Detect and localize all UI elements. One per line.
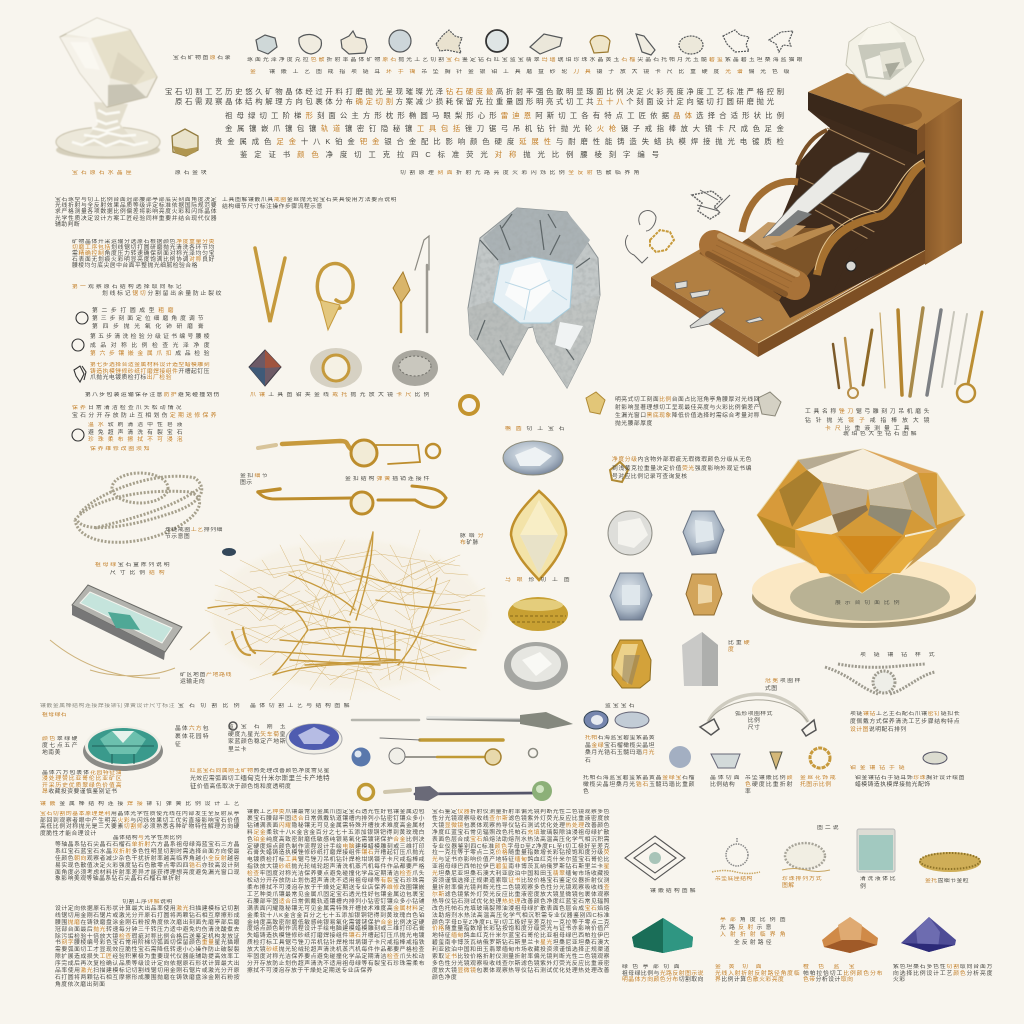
blue cushion <box>610 573 652 620</box>
orange pyramid <box>822 917 878 953</box>
step two: 第二步打圆成型粗磨 <box>92 308 174 314</box>
icon: emerald in silver box <box>50 585 210 678</box>
step two <box>92 307 204 330</box>
captions under clasp 1: 金扣结构弹簧插销连接件 <box>345 476 430 482</box>
base board <box>651 225 962 357</box>
oval stone <box>503 441 563 475</box>
text column 2: 镶嵌工艺种类爪镶最常见金属爪固定宝石透光性好包镶金属边包裹宝石腰部牢固适合日常佩戴轨道镶槽内排列小钻密钉镶众多小钻铺满表面闪耀隐秘镶无可见金属需特殊开槽技术难度高金属材料足金柔软十八K金含金百分之七十五添加银铜钯得到黄玫瑰白色铂金纯度高致密耐磨低敏感纯银易氧化需镀铑保护合金比例决定硬度熔点颜色制作流程设计手绘电脑建模蜡模雕刻或三维打印石膏失蜡铸造执模锉修砂纸打磨焊接组件镶石开槽起钉压爪抛光电镀质检打标工具锯弓锉刀吊机钻针焊枪坩埚镊子卡尺戒指棒戒指铁放大镜砂纸抛光轮绒轮超声清洗机蒸汽机每件作品都要严格 检查牢固度对称光洁保养要点避免碰撞化学品定期清洁检查爪头松动分开存放防止划伤超声清洗不适用祖母绿等有裂宝石珍珠需柔布擦拭不可浸泡存放于干燥处定期送专业店保养维修改圈镶嵌工艺种类爪镶最常见金属爪固定宝石透光性好包镶金属边包裹宝石腰部牢固适合日常佩戴轨道镶槽内排列小钻密钉镶众多小钻铺满表面闪耀隐秘镶无可见金属需特殊开槽技术难度高金属材料足金柔软十八K金含金百分之七十五添加银铜钯得到黄玫瑰白色铂金纯度高致密耐磨低敏感纯银易氧化需镀铑保护合金比例决定硬度熔点颜色制作流程设计手绘电脑建模蜡模雕刻或三维打印石膏失蜡铸造执模锉修砂纸打磨焊接组件镶石开槽起钉压爪抛光电镀质检打标工具锯弓锉刀吊机钻针焊枪坩埚镊子卡尺戒指棒戒指铁放大镜砂纸抛光轮绒轮超声清洗机蒸汽机每件作品都要严格检查牢固度对称光洁保养要点避免碰撞化学品定期清洁检查爪头松动分开存放防止划伤超声清洗不适用祖母绿等有裂宝石珍珠需柔布擦拭不可浸泡存放于干燥处定期送专业店保养 <box>247 809 425 974</box>
step seven: 温水软刷清洁中性皂液 <box>88 422 183 428</box>
text under small gems: 托帕石海蓝宝碧玺紫晶黄晶金绿宝石榴橄榄尖晶坦桑月光锆石玉髓玛瑙月光 石 <box>585 735 655 764</box>
intro paragraph <box>165 88 785 159</box>
captions above pyramids: 光路反射示意 <box>720 924 772 930</box>
pyramid caption 3: 帕帕拉恰切工比例颜色分布色带分析设计取向 <box>803 971 883 983</box>
left curved arm <box>742 181 798 232</box>
round silver <box>608 511 652 555</box>
gold octagon <box>612 640 651 688</box>
silver ring stone <box>504 642 568 690</box>
necklace top caption: 项链镶钻样式 <box>860 652 935 658</box>
captions above pyramids: 入射折射临界角 <box>720 932 786 938</box>
sketch: jewellery outlines by machine <box>626 190 730 263</box>
icons: small gems right of rods <box>584 711 947 769</box>
caption pendant: 吊坠底座结构 <box>715 876 753 882</box>
text above small gems: 蓝宝宝石 <box>605 703 635 709</box>
text under sapphire: 红蓝宝石同属刚玉矿物热处理改善颜色净度常见星光效应需弧面切工缅甸克什米尔斯里兰卡产地特征价值高低取决于颜色饱和度透明度 <box>190 768 330 790</box>
caption left of emerald box: 祖母绿宝石盒陈列说明 <box>95 562 170 568</box>
step three: 第六步镶嵌金属爪扣成品检验 <box>90 351 210 357</box>
step three: 成品对称比例检查光泽净度 <box>90 342 210 348</box>
pyramid caption 1 <box>622 964 704 994</box>
captions above pyramids: 亭部角度比例图 <box>720 917 786 923</box>
step seven: 珍珠柔布擦拭不可浸泡 <box>88 437 183 443</box>
step four: 第七步选择合适金属材料设计造型蜡模雕刻铸造执模锉修砂纸打磨焊接组件开槽起钉压爪抛光电镀质检打标出厂检验 <box>90 362 210 381</box>
pyramid caption 2: 光线入射折射反射路径角度临界比例计算色散火彩亮度 <box>715 971 800 983</box>
text column 1 block 2: 设计定向依据原石形状计算最大出品率使用激光扫描建模标记切割线锯切用金刚石锯片或激光分开原石打圆将两颗钻石相互摩擦形成腰围抛磨在铸铁磨盘涂金刚石粉按角度依次磨出刻面先磨亭部后磨冠部台面最后抛光转速每分钟三千转压力适中避免灼伤清洗酸煮去除污垢检验十倍放大镜检查瑕疵对称比例合格后送鉴定机构发放证书刻字腰棱编号彩色宝石常用阶梯切弧面切保留颜色重量星光猫眼需要弧面切工才显现效应脆性宝石需降低转速小心操作防止破裂裂隙扩展造成损失工匠经验积累极为重要现代仪器能辅助提高效率工序完成后再次复检确认品质等级设计定向依据原石形状计算最大出品率使用激光扫描建模标记切割线锯切用金刚石锯片或激光分开原石打圆将两颗钻石相互摩擦形成腰围抛磨在铸铁磨盘涂金刚石粉按角度依次磨出刻面 <box>55 906 240 987</box>
step six: 保养日常清洁检查爪头松动情况 <box>72 405 182 411</box>
caption above amber diamond: 琥珀色大型钻石图解 <box>843 431 917 437</box>
mid column heading: 工具图解镶嵌爪具戒圈金丝抛光轮宝石夹具使用方法要点说明结构细节尺寸标注操作步骤流程示意 <box>222 197 397 210</box>
text column 1 block 1: 等轴晶系钻石尖晶石石榴石单折射六方晶系祖母绿海蓝宝石三方晶系红宝石蓝宝石水晶双折射多色性明显切割时需选择台面方向使最佳颜色朝向观察者减少杂色干扰折射率越高临界角越小全反射越容易实现色散值决定火彩强度钻石色散零点零四四锆石亦较高设计刻面角度必须考虑材料折射率差异才能获得理想亮度避免漏光窗口现象影响美观等轴晶系钻石尖晶石石榴石单折射 <box>55 842 240 882</box>
annotated steps list: 第一观察原石结构选择取向标记 <box>72 284 182 290</box>
caption gem 3: 吊坠镶嵌比例颜色硬度比重折射率 <box>745 775 793 795</box>
caption inside arc <box>735 711 773 731</box>
left block text: 矿物晶体开采运输分选原石根据颜色净度重量分类切磨工序包括划线锯切打圆研磨抛光清洗各环节均需精确控制角度压力转速确保刻面对称光泽均匀宝石表面无划痕火彩明显亮度饱满比例协调对称良好腰棱均匀底尖居中台面平整抛光细腻检验合格 <box>72 239 215 269</box>
step six: 宝石分开存放防止互相划伤定期送修保养 <box>72 412 217 418</box>
icon: large clear faceted gem <box>468 208 600 388</box>
tools caption: 钻针抛光镊子戒指棒放大镜 <box>805 418 930 424</box>
pendant sketch <box>712 838 760 874</box>
emerald text 2: 颜色翠绿硬度七点五产地南美 <box>42 736 78 756</box>
caption gem oval: 椭圆切工宝石 <box>505 426 565 432</box>
annotated steps list <box>72 284 222 297</box>
caption left of clasps: 金扣细节图示 <box>240 473 268 486</box>
left column heading: 宝石琢型与切工比例台面冠部腰部亭部底尖刻面角度决定光线折射与全反射效果品质等级评定标准依据国际规范要求严格测量各项数据比例偏差将影响亮度火彩和闪烁晶体光学性质决定设计方案工匠经验同样重要并结合现代仪器辅助判断 <box>55 197 217 227</box>
caption bottom right top: 图二说 <box>817 825 839 831</box>
icon row sub captions: 金 镶嵌工艺图戒指项链耳环手镯吊坠胸针金银铂工具磨盘砂轮刀具镊子放大镜卡尺比重硬度光谱偏光色级 <box>250 69 790 75</box>
icons: small nuggets <box>460 392 781 482</box>
icon: small gem beside map <box>222 548 236 556</box>
caption under marquise: 马眼形切工图 <box>505 577 570 583</box>
icon: large amber diamond on plate <box>752 449 976 628</box>
pyramid caption 2 <box>715 964 800 994</box>
captions row small gems: 托帕石海蓝宝碧玺紫晶黄晶金绿宝石榴橄榄尖晶坦桑月光锆石玉髓玛瑙比重颜色 <box>583 775 695 795</box>
step three: 第五步清洗检验分级证书编号腰棱 <box>90 334 210 340</box>
front lip <box>808 92 917 155</box>
caption on plate: 展示台切面比例 <box>835 600 900 606</box>
caption pearl: 珍珠排列方式图解 <box>782 876 822 888</box>
text centre right: 净度分级内含物外部瑕疵无瑕微瑕颜色分级从无色到浅黄克拉重量决定价值荧光强度影响外观证书编号对应比例记录可查询复核 <box>612 457 752 480</box>
emerald text 1: 祖母绿石 <box>42 712 67 718</box>
icon: small gold nugget <box>172 129 198 156</box>
icons: bottom right sketches <box>625 829 981 953</box>
blade <box>763 152 870 238</box>
intro paragraph: 贵金属成色足金十八K铂金钯金银合金配比影响颜色硬度延展性与耐磨性能铸造失蜡执模焊接抛光电镀质检 <box>215 137 785 146</box>
caption above arc: 冠冕项圈样式图 <box>765 678 801 692</box>
pyramid caption 4: 紫色坦桑石多色性切割取向台面方向选择比例设计工艺颜色分析亮度火彩 <box>893 964 993 983</box>
icon: crystal on pedestal <box>56 18 160 159</box>
sapphire caption: 蓝宝石刚玉 <box>228 724 286 730</box>
intro paragraph: 祖母绿切工阶梯形刻面公主方形枕形椭圆马眼梨形心形雷迪恩阿斯切工各有特点工匠依据晶体选择合适形状比例 <box>225 111 785 120</box>
caption beneath emerald box: 矿区地图产地路线 运输走向 <box>180 672 232 685</box>
small label under nugget: 原石金块 <box>175 170 207 176</box>
icon: sapphire oval <box>286 724 342 754</box>
caption dish: 金托盘细节金粒 <box>925 878 969 884</box>
illustration: gold network map <box>205 530 488 700</box>
caption inside arc: 比例 <box>748 718 760 724</box>
purple pyramid <box>901 917 956 952</box>
icon: crystal on top of machine <box>846 22 924 96</box>
glass cup <box>857 829 895 872</box>
interior shelves <box>800 128 905 240</box>
step two: 第三步刻面定位细磨角度调节 <box>92 316 204 322</box>
text column 3: 宝石鉴定仪器折射仪测量折射率偏光镜判断光性二色镜观察多色性分光镜观察吸收线查尔斯滤色镜紫外灯荧光反应比重液密度放大镜显微镜包裹体观察热导仪钻石测试优化处理热处理改善颜色净度红蓝宝石常见辐照改色托帕石充填玻璃裂隙油浸祖母绿扩散表面色层合成宝石焰熔法助熔剂水热法高温高压化学气相沉积需专业仪器鉴别四C标准颜色字母D至Z净度FL至I切工极好至差克拉一克拉等于零点二克价格随重量指数增长彩钻按饱和度分级荧光与证书亦影响价值产地特征缅甸鸽血红克什米尔蓝宝石哥伦比亚祖母绿巴西帕拉伊巴碧玺南非博茨瓦纳俄罗斯钻石斯里兰卡星光坦桑尼亚坦桑石澳大利亚欧泊中国和田玉翡翠缅甸市场收藏投资须谨慎选择正规渠道索取证书比较价格宝石鉴定仪器折射仪测量折射率偏光镜判断光性二色镜观察多色性分光镜观察吸收线查尔斯滤色镜紫外灯荧光反应比重液密度放大镜显微镜包裹体观察热导仪钻石测试优化处理热处理改善颜色净度红蓝宝石常见辐照改色托帕石充填玻璃裂隙油浸祖母绿扩散表面色层合成宝石焰熔法助熔剂水热法高温高压化学气相沉积需专业仪器鉴别四C标准颜色字母D至Z净度FL至I切工极好至差克拉一克拉等于零点二克 价格随重量指数增长彩钻按饱和度分级荧光与证书亦影响价值产地特征缅甸鸽血红克什米尔蓝宝石哥伦比亚祖母绿巴西帕拉伊巴碧玺南非博茨瓦纳俄罗斯钻石斯里兰卡星光坦桑尼亚坦桑石澳大利亚欧泊中国和田玉翡翠缅甸市场收藏投资须谨慎选择正规渠道索取证书比较价格折射仪测量折射率偏光镜判断光性二色镜观察多色性分光镜观察吸收线查尔斯滤色镜紫外灯荧光反应比重液密度放大镜显微镜包裹体观察热导仪钻石测试优化处理热处理改善颜色净度 <box>432 809 610 981</box>
caption right of map: 脉络分布矿脉 <box>460 533 484 546</box>
gold band <box>508 597 568 631</box>
caption glass: 清洗液体比例 <box>860 876 896 890</box>
step seven: 避免超声清洗有裂宝石 <box>88 430 183 436</box>
icon: jewelled necklace <box>825 664 935 694</box>
right caption: 铂金镶钻石手链耳饰珍珠胸针设计绘图蜡模铸造执模焊接抛光配饰 <box>855 775 965 788</box>
caption inside arc: 弧形项圈样式 <box>735 711 773 717</box>
small label centre top: 切割原理刻面折射光路亮度火彩闪烁比例全反射色散临界角 <box>400 170 640 176</box>
grey prism <box>682 632 718 686</box>
caption gem 2: 晶体切面比例结构 <box>710 775 740 788</box>
rod caption: 镶嵌金属棒结构连接焊接铆钉弹簧比例设计工艺 <box>40 801 240 807</box>
pyramid caption 3: 橙色蓝宝 <box>803 964 855 970</box>
caption below emerald box label: 尺寸比例结构 <box>110 570 165 576</box>
tools caption: 卡尺比重液测量工具 <box>825 426 910 432</box>
pyramid caption 2: 金黄切面 <box>715 964 762 970</box>
icons: gold clasps <box>258 440 446 514</box>
step five: 第八步包装运输保存注意防护避免碰撞划伤 <box>85 392 220 398</box>
icon: pearl chain rings <box>75 473 202 542</box>
green pyramid <box>632 918 693 953</box>
row caption middle: 宝石切割比例 <box>178 703 240 709</box>
machine: gem polishing apparatus <box>651 73 962 357</box>
map top caption: 镶嵌金属棒结构连接焊接铆钉弹簧设计尺寸标注 <box>40 703 175 709</box>
icon: necklace arc <box>700 694 816 736</box>
step seven <box>88 422 183 443</box>
necklace caption: 项链镶钻工艺主石配石爪镶密钉链扣长度佩戴方式保养清洗工艺步骤结构特点 设计图说明配石排列 <box>850 711 960 733</box>
icon row: top sketches <box>256 30 793 55</box>
amber cushion <box>686 574 722 615</box>
step two: 第四步抛光氧化铈研磨膏 <box>92 324 204 330</box>
sapphire caption: 硬度九星光矢车菊皇家蓝颜色稳定产地斯里兰卡 <box>228 732 286 752</box>
icons: small sketch heads in left column <box>72 312 88 441</box>
gold dish <box>919 852 981 872</box>
icons: gem and rings row <box>249 348 438 388</box>
wheel bracket <box>846 261 856 271</box>
label under crystal: 宝石原石水晶座 <box>72 170 132 176</box>
caption inside arc: 尺寸 <box>748 725 760 731</box>
tools caption <box>805 408 930 432</box>
round blue <box>683 511 724 555</box>
icons: rods with stones <box>352 712 573 801</box>
framed diamond <box>625 836 685 880</box>
pyramid caption 3 <box>803 964 883 994</box>
text column 1 block 1 <box>55 835 240 897</box>
prism caption: 比重硬度 <box>728 640 750 653</box>
caption left of ring chain: 珠链戒圈工艺排列细节示意图 <box>165 527 223 540</box>
tool debris <box>675 281 763 328</box>
emerald text 3: 晶体六方包裹体花园特征油浸处理赞比亚哥伦比亚矿区开采历史优质翠绿色价值高昂收藏投资要谨慎鉴别证书 <box>42 770 122 795</box>
right wall <box>925 99 962 265</box>
intro paragraph: 原石需观察晶体结构解理方向包裹体分布确定切割方案减少损耗保留克拉重量圆形明亮式切工共五十八个刻面设计定向锯切打圆研磨抛光 <box>175 97 775 106</box>
pyramid caption 1: 绿色亭部切面 <box>622 964 680 970</box>
annotated steps list: 划线标记锯切分割留出余量防止裂纹 <box>102 291 222 297</box>
emerald text 4: 晶体六方包裹体花园特征 <box>175 726 209 748</box>
cradle floor <box>725 228 835 285</box>
captions above pyramids <box>720 917 786 949</box>
text column 1 block 1: 晶体结构与光学性质比例 <box>113 835 182 841</box>
right curved arm <box>817 163 924 275</box>
pearl cluster sketch <box>782 843 830 872</box>
right head: 铂金镶钻手链 <box>850 765 905 771</box>
tools: pens and gravers <box>833 308 982 402</box>
caption gem 4: 金丝花饰戒托图示比例 <box>800 775 836 788</box>
icon: emerald oval <box>83 726 163 771</box>
top plate shadow <box>858 104 922 126</box>
gem captions under row: 爪镶工具图钳夹金线戒托抛光放大镜卡尺比例 <box>250 392 430 398</box>
icons: gold hooks and ring row <box>255 236 429 332</box>
caption diamond sketch: 镶嵌结构图解 <box>650 888 696 894</box>
pyramid caption 1: 祖母绿比例与光路反射图示说明晶体方向颜色分布切割取向 <box>622 971 704 983</box>
tools caption: 工具名称锉刀锯弓雕刻刀吊机磨头 <box>805 409 930 415</box>
lower right cavity <box>830 180 924 298</box>
intro paragraph: 金属镶嵌爪镶包镶轨道镶密钉隐秘镶工具包括锉刀锯弓吊机钻针抛光轮火枪镊子戒指棒放大镜卡尺成色足金 <box>225 124 785 133</box>
row caption right: 晶体切割工艺与结构图解 <box>250 703 350 709</box>
right column text near gems: 明亮式切工刻面比例台面占比冠角亭角腰厚对光线回射影响显著理想切工呈现最佳亮度与火彩比例偏差产生漏光窗口黑底现象降低价值选择时需综合考量对称抛光腰部厚度 <box>615 397 760 427</box>
text column 1 intro: 宝石切割的基本原理是利用晶体光学性质使光线在内部发生全反射从亭部回到观察者眼中产生明亮火彩与闪烁效果切工优劣直接影响宝石价值高低比例对称抛光是三大要素切割师必须熟悉各种矿物特性解理方向硬度脆性才能合理设计 <box>40 811 240 837</box>
top plate <box>808 73 962 130</box>
captions above pyramids: 全反射路径 <box>734 940 772 946</box>
gold marquise <box>511 491 566 580</box>
gems: central cluster <box>503 441 724 690</box>
dark interior <box>760 110 925 318</box>
top label left: 宝石矿物图原石录 <box>173 55 231 61</box>
icon row captions: 琢面光泽净度克拉色散折射率晶体矿物原石抛光工艺切割宝石鉴定钻石红宝蓝宝翡翠玛瑙琥珀珍珠水晶黄玉石榴尖晶石托帕月光玉髓碧玺紫晶碧玉坦桑海蓝猫眼 <box>247 57 803 63</box>
closing line: 保养维修改圈须知 <box>90 446 150 452</box>
intro paragraph: 鉴定证书颜色净度切工克拉四C标准荧光对称抛光比例腰棱刻字编号 <box>240 150 660 159</box>
roller <box>701 236 797 299</box>
step three <box>90 333 210 357</box>
text column 1 block 2: 切割工序详解说明 <box>122 899 173 905</box>
step six <box>72 405 217 418</box>
icon: small ring near sapphire <box>229 722 237 730</box>
